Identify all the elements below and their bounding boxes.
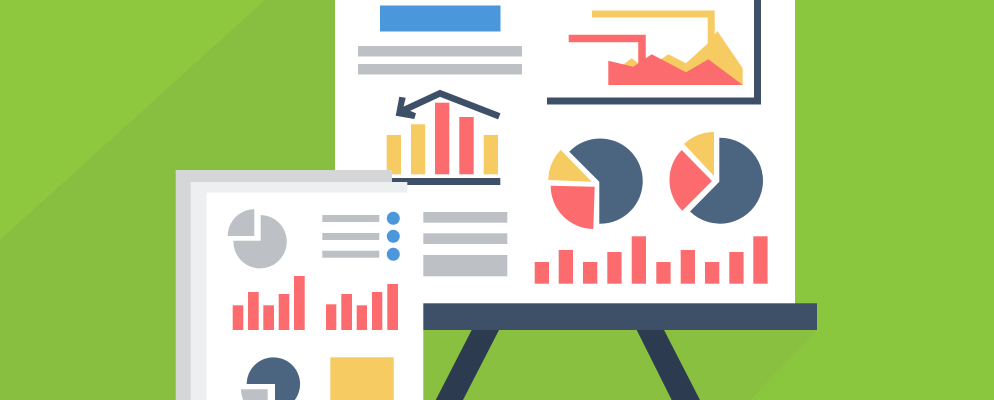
- yellow and red bars: [387, 103, 498, 174]
- panel: front document stack: [176, 170, 423, 400]
- yellow legend line: [592, 14, 711, 46]
- area chart: [547, 0, 758, 101]
- board stand: [423, 303, 817, 400]
- grey text lines: [358, 46, 522, 74]
- yellow area: [620, 31, 743, 85]
- chart baseline: [385, 178, 500, 185]
- front sheet: [207, 193, 423, 400]
- wide red bar chart: [535, 236, 768, 284]
- panel: presentation board: [335, 0, 795, 304]
- dark pie chart: [241, 357, 300, 400]
- grey legend lines: [322, 215, 379, 258]
- yellow square: [330, 357, 394, 400]
- grey text blocks on board: [423, 212, 507, 276]
- grey pie chart: [228, 209, 287, 268]
- right leg: [637, 330, 700, 400]
- left leg: [436, 330, 499, 400]
- back sheet: [176, 170, 392, 400]
- pie chart left: [548, 139, 643, 229]
- bar chart with trend arrow: [385, 93, 500, 185]
- blue heading block: [380, 6, 500, 32]
- middle sheet: [191, 182, 407, 400]
- blue legend dots: [387, 212, 400, 261]
- red bar chart one: [233, 276, 305, 330]
- chart frame: [547, 0, 758, 101]
- arrow: [396, 93, 499, 119]
- red bar chart two: [326, 284, 398, 330]
- tray bar: [423, 303, 817, 330]
- red area: [608, 54, 743, 85]
- red legend line: [569, 38, 642, 66]
- pie chart right: [669, 132, 763, 224]
